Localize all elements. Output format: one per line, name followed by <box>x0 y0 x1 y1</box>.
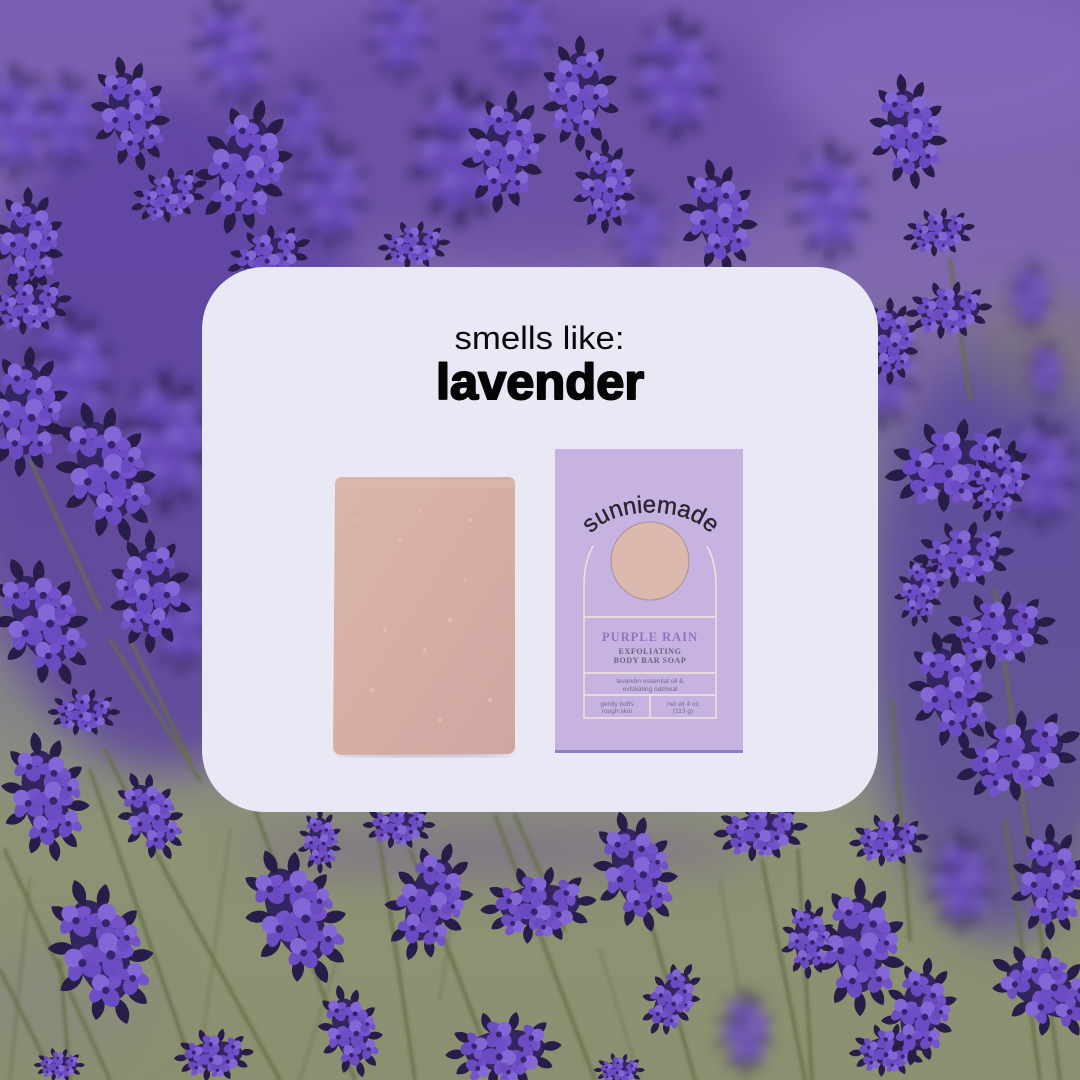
box small print: gently buffs <box>600 701 635 708</box>
panel: product card <box>202 267 878 812</box>
box label text <box>602 630 698 665</box>
box small print: exfoliating oatmeal <box>623 686 678 693</box>
heading: lavender: lavender <box>436 354 644 410</box>
box small print: (113 g) <box>673 708 693 715</box>
box label text: BODY BAR SOAP <box>614 656 686 665</box>
soap bar <box>333 477 515 757</box>
heading: smells like: smells like: <box>454 320 624 356</box>
box label text: EXFOLIATING <box>619 647 681 656</box>
box small print: rough skin <box>602 708 633 715</box>
brand arc: sunniemade <box>584 495 717 532</box>
box small print: net wt 4 oz <box>667 701 699 708</box>
product box: sunniemade <box>555 449 743 753</box>
label frame lines <box>584 546 716 718</box>
soap window <box>611 522 689 600</box>
box label text: PURPLE RAIN <box>602 630 698 644</box>
box small print: lavandin essential oil & <box>616 678 684 685</box>
box small print <box>600 678 699 715</box>
